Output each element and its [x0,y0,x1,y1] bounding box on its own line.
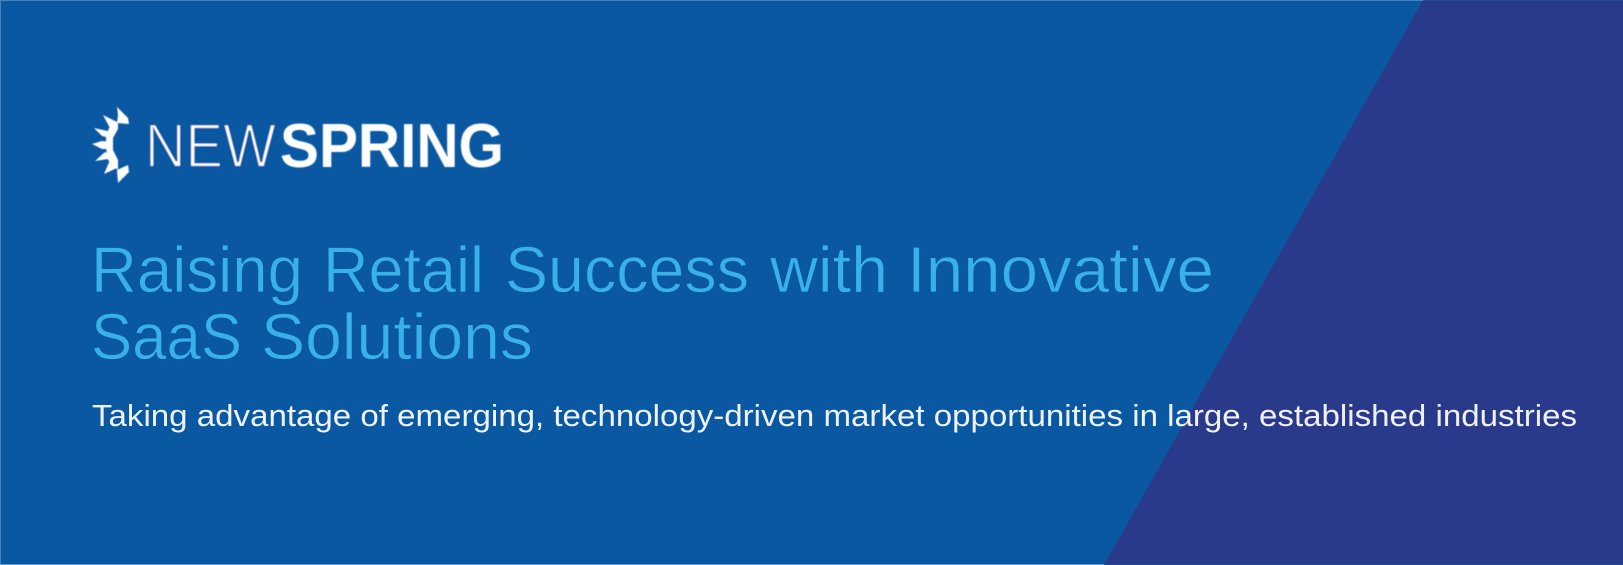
title [91,233,1214,373]
title line 1: Success [505,233,749,306]
title line 1: Retail [323,233,484,306]
icon: sunburst [92,107,129,183]
title line 2 [91,300,533,373]
logo wordmark bold: SPRING [280,112,504,181]
title line 2: Solutions [261,300,533,373]
logo: NewSpring [92,107,504,183]
logo wordmark light: NEW [145,112,276,181]
title line 1: with [769,233,888,306]
title line 1: Innovative [907,233,1214,306]
title line 2: SaaS [91,300,242,373]
title line 1: Raising [91,233,303,306]
subtitle: Taking advantage of emerging, technology-driven market opportunities in large, established industries [92,398,1577,433]
diagonal dark panel [1104,0,1623,565]
title line 1 [91,233,1214,306]
